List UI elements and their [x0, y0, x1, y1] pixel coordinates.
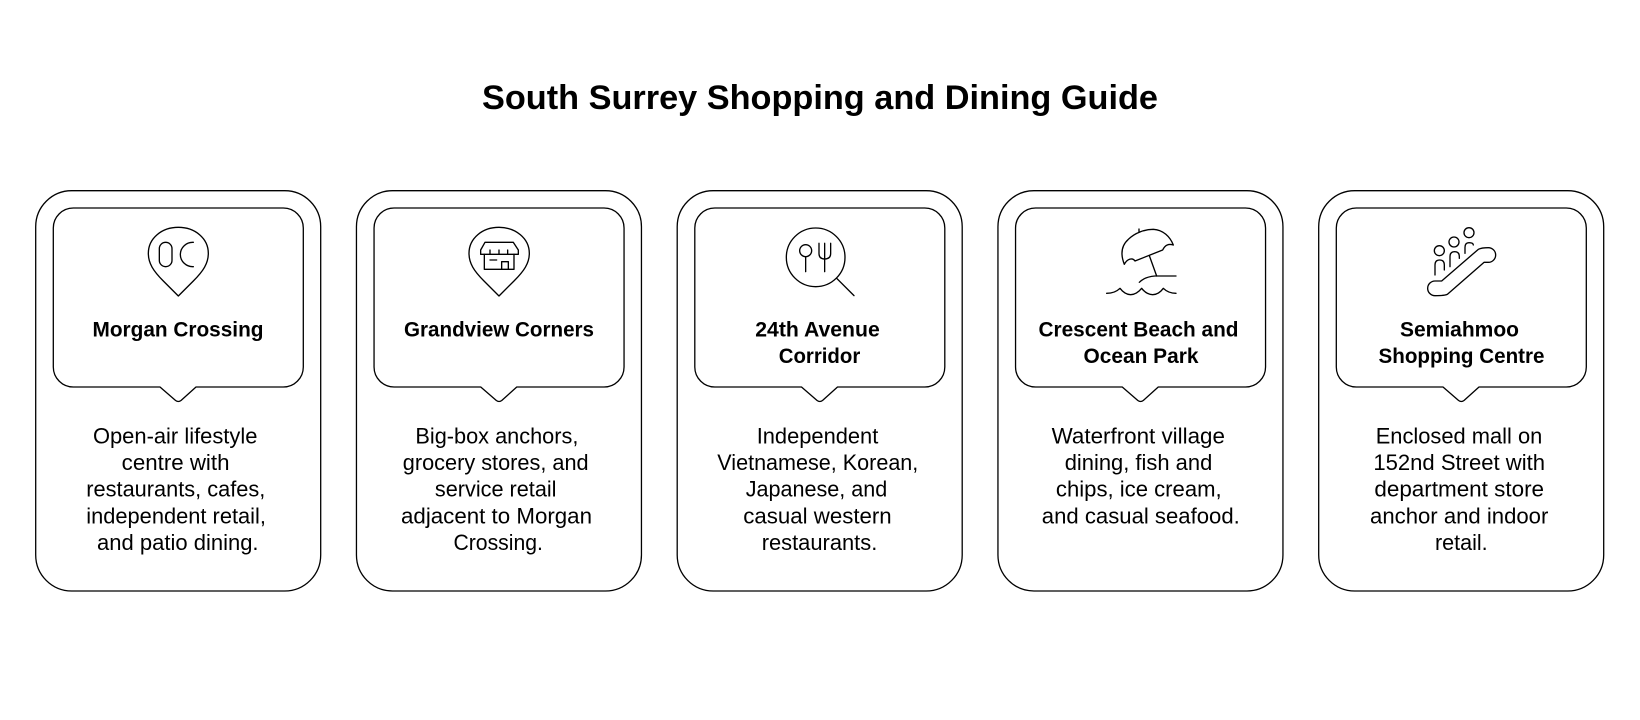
description: Japanese, and: [746, 477, 887, 502]
panel: Semiahmoo Shopping Centre: [1319, 191, 1604, 591]
description: [1370, 423, 1548, 555]
panel: Semiahmoo Shopping Centre: Shopping Centre: [1378, 344, 1545, 368]
panel outline: [1319, 191, 1604, 591]
panel: 24th Avenue Corridor: Corridor: [779, 344, 861, 368]
description: dining, fish and: [1065, 450, 1212, 475]
description: centre with: [122, 450, 230, 475]
icon: beach umbrella over waves: [1107, 229, 1176, 295]
header callout: [374, 208, 624, 402]
panel: Crescent Beach and Ocean Park: Ocean Park: [1084, 344, 1199, 368]
description: Vietnamese, Korean,: [717, 450, 918, 475]
description: 152nd Street with: [1373, 450, 1545, 475]
description: adjacent to Morgan: [401, 503, 592, 528]
panel: Crescent Beach and Ocean Park: [998, 191, 1283, 591]
description: and casual seafood.: [1042, 503, 1240, 528]
description: chips, ice cream,: [1056, 477, 1222, 502]
header callout: [53, 208, 303, 402]
title: South Surrey Shopping and Dining Guide: [482, 79, 1158, 117]
heading: Semiahmoo: [1400, 318, 1519, 342]
heading: Grandview Corners: [404, 318, 594, 342]
description: Big-box anchors,: [415, 423, 578, 448]
heading: Morgan Crossing: [92, 318, 264, 342]
description: service retail: [435, 477, 556, 502]
header callout: [1336, 208, 1586, 402]
description: [1042, 423, 1240, 528]
panel outline: [356, 191, 641, 591]
description: [401, 423, 592, 555]
description: casual western: [743, 503, 892, 528]
description: restaurants, cafes,: [86, 477, 265, 502]
icon: map pin with OC monogram: [148, 227, 208, 296]
description: Independent: [757, 423, 878, 448]
panel outline: [677, 191, 962, 591]
description: grocery stores, and: [403, 450, 589, 475]
description: Open-air lifestyle: [93, 423, 257, 448]
icon: people on escalator: [1428, 228, 1496, 296]
description: and patio dining.: [97, 530, 259, 555]
icon: magnifier with spoon and fork: [786, 228, 854, 296]
description: Enclosed mall on: [1376, 423, 1542, 448]
description: Crossing.: [453, 530, 543, 555]
description: department store: [1374, 477, 1544, 502]
description: Waterfront village: [1052, 423, 1225, 448]
panel outline: [36, 191, 321, 591]
heading: 24th Avenue: [755, 318, 880, 342]
description: restaurants.: [762, 530, 877, 555]
panel: 24th Avenue Corridor: [677, 191, 962, 591]
description: [86, 423, 266, 555]
icon: map pin with storefront: [469, 227, 529, 296]
heading: Crescent Beach and: [1038, 318, 1238, 342]
description: [717, 423, 918, 555]
panel outline: [998, 191, 1283, 591]
panel: Morgan Crossing: [36, 191, 321, 591]
description: anchor and indoor: [1370, 503, 1548, 528]
description: independent retail,: [86, 503, 266, 528]
header callout: [695, 208, 945, 402]
panel: Grandview Corners: [356, 191, 641, 591]
header callout: [1016, 208, 1266, 402]
description: retail.: [1435, 530, 1488, 555]
